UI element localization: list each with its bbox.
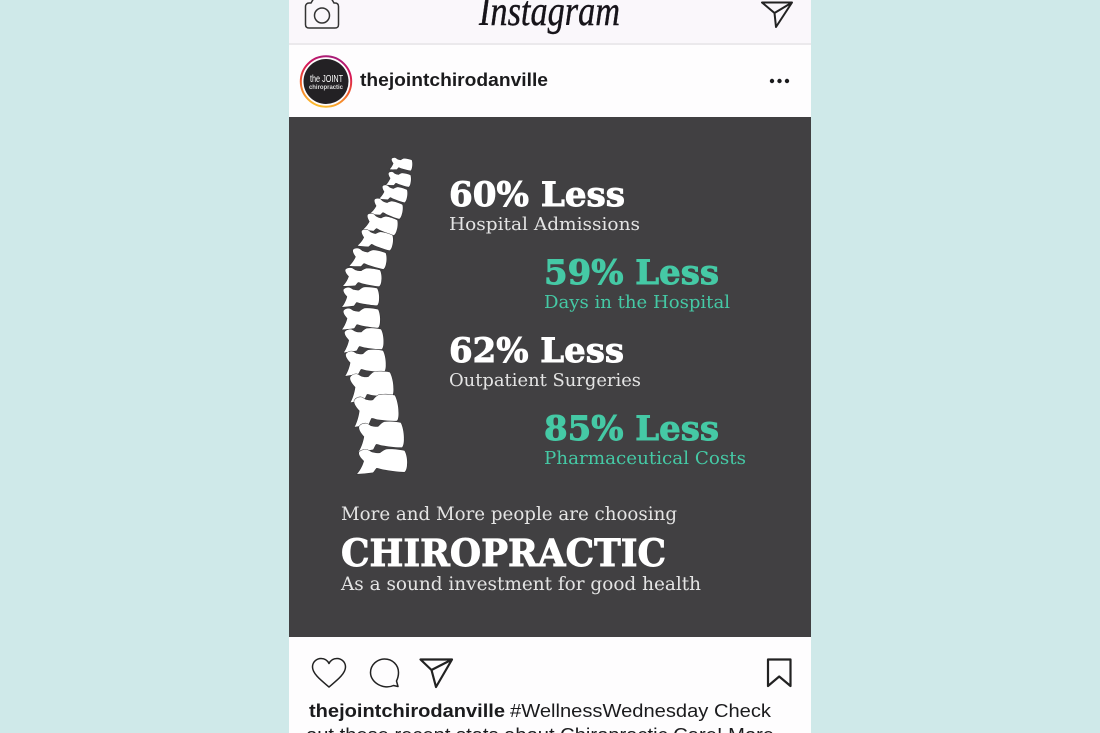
caption: #WellnessWednesday Check (510, 700, 772, 721)
stat: 59% less: Days in the Hospital (544, 292, 730, 313)
caption (306, 700, 774, 733)
stat: 59% less (544, 253, 730, 313)
post header (301, 56, 789, 107)
stat: 60% less: Hospital Admissions (449, 214, 640, 235)
stat: 85% less: 85% Less (544, 409, 719, 449)
closing message: As a sound investment for good health (340, 574, 701, 595)
icon: send (762, 2, 792, 27)
icon: heart (312, 658, 346, 687)
stat: 85% less: Pharmaceutical Costs (544, 448, 746, 469)
closing message (340, 504, 701, 595)
icon: more dots (770, 79, 789, 83)
stat: 60% less (449, 175, 640, 235)
closing message: CHIROPRACTIC (341, 531, 666, 575)
panel: infographic (289, 117, 811, 637)
stat: 60% less: 60% Less (449, 175, 625, 215)
stat: 62% less: Outpatient Surgeries (449, 370, 641, 391)
icon: share (420, 660, 452, 687)
avatar: the JOINT (310, 74, 343, 85)
phone screen (289, 0, 811, 733)
icon: camera (306, 0, 338, 28)
caption: thejointchirodanville (309, 700, 505, 721)
avatar: chiropractic (309, 85, 344, 91)
icon: comment (370, 659, 398, 687)
stat: 62% less (449, 331, 641, 391)
stat: 62% less: 62% Less (449, 331, 624, 371)
closing message: More and More people are choosing (341, 504, 677, 525)
avatar (301, 56, 351, 107)
spine illustration (342, 157, 413, 474)
stat: 85% less (544, 409, 746, 469)
action bar (312, 658, 790, 687)
username: thejointchirodanville (360, 70, 548, 90)
top app bar (289, 0, 811, 45)
icon: bookmark (768, 660, 790, 686)
stat: 59% less: 59% Less (544, 253, 719, 293)
